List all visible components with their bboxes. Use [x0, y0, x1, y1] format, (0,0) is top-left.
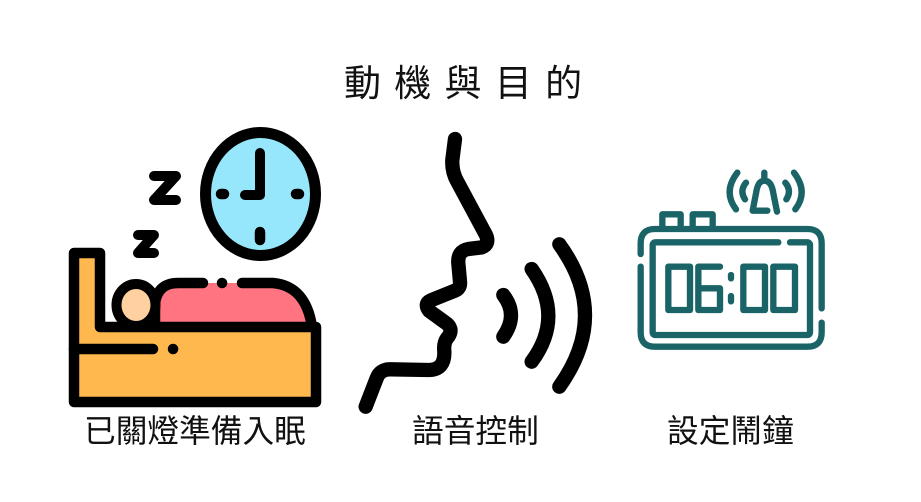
- buttons: [662, 214, 713, 227]
- screen: [653, 242, 810, 335]
- ringing arcs: [730, 173, 802, 209]
- icon: large Z: [154, 176, 176, 200]
- icon: blanket: [155, 283, 312, 327]
- clock body: [641, 229, 822, 347]
- bell: [753, 173, 777, 212]
- face profile: [366, 139, 487, 407]
- label: voice control: 語音控制: [412, 413, 539, 449]
- sound waves: [503, 244, 585, 387]
- icon: wall clock: [206, 132, 316, 256]
- icon: sleeping person in bed with clock: [74, 132, 316, 402]
- label: set alarm: 設定鬧鐘: [667, 413, 794, 449]
- icon: speaking face profile with sound waves: [366, 139, 585, 407]
- digits 06:00: [668, 267, 795, 310]
- title: 動 機 與 目 的: [344, 63, 584, 104]
- label: lights off, ready to sleep: 已關燈準備入眠: [84, 413, 306, 449]
- icon: head: [116, 284, 156, 326]
- icon: small Z: [138, 235, 154, 253]
- icon: bed: [74, 253, 316, 402]
- icon: digital alarm clock: [641, 173, 822, 347]
